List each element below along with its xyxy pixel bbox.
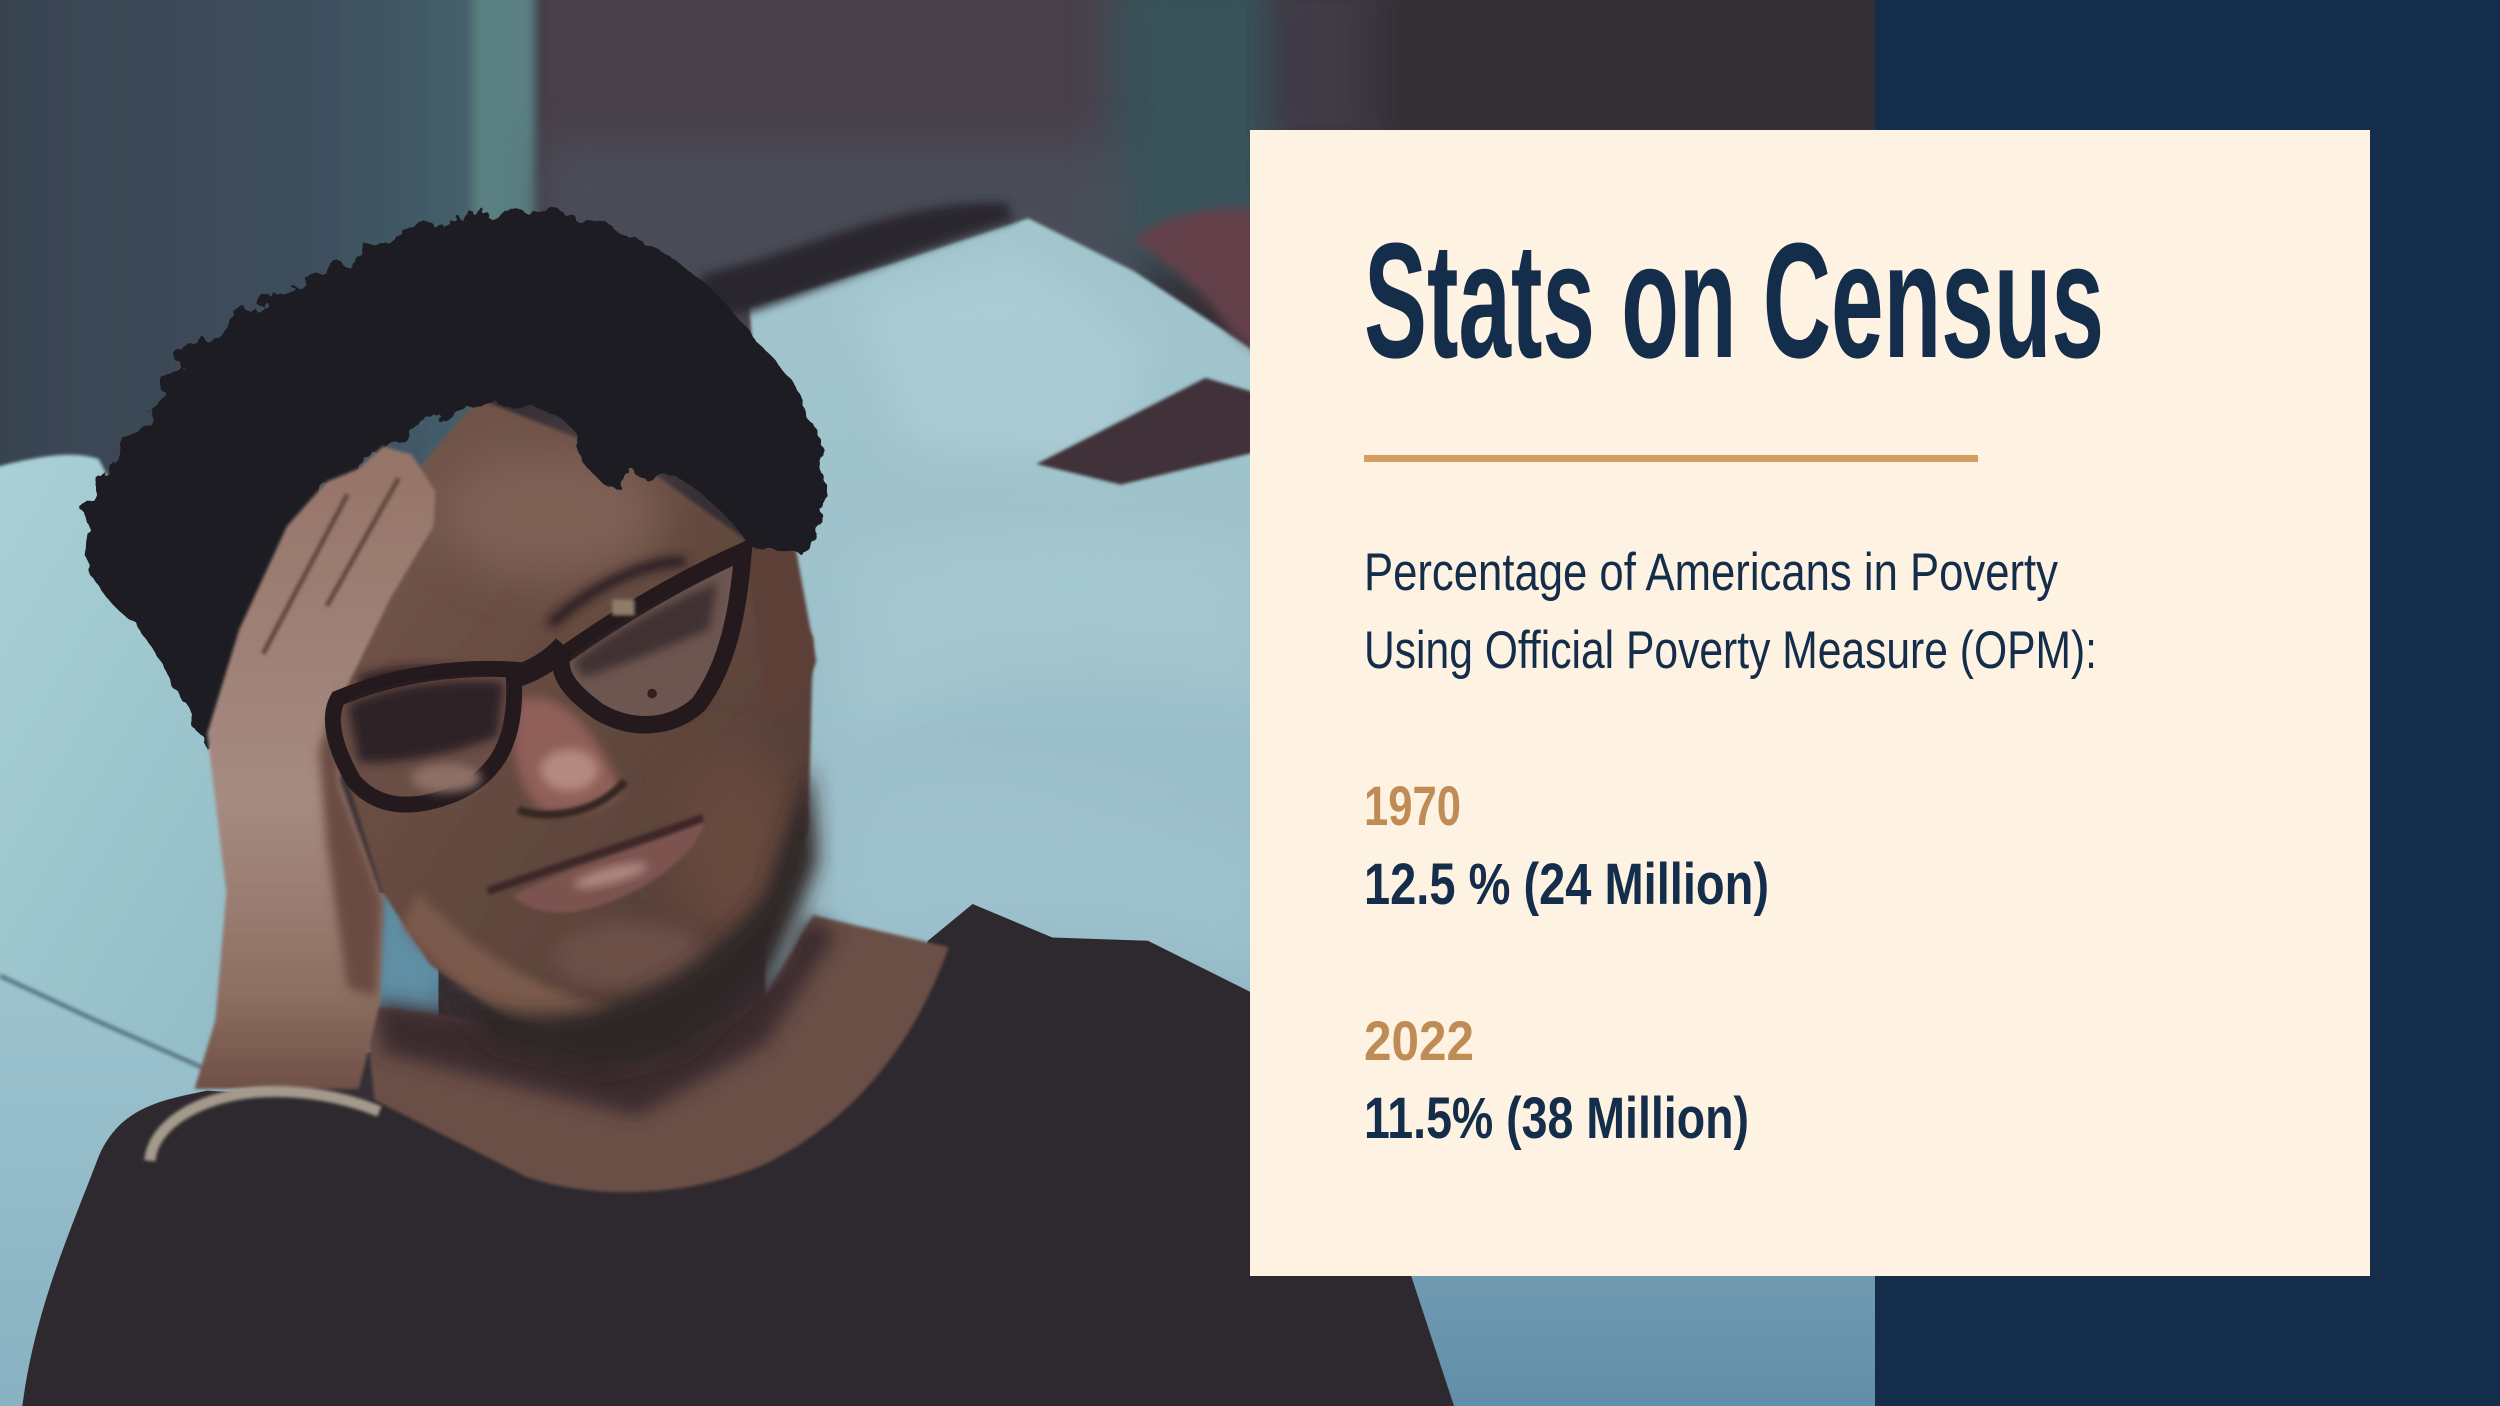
stat: 1970 xyxy=(1364,774,1769,917)
value 1970: 12.5 % (24 Million) xyxy=(1364,852,1769,917)
nostril shadow xyxy=(518,781,625,815)
bed sheet xyxy=(749,218,1913,1406)
cheek and chin tone xyxy=(670,749,797,941)
sleeve edge xyxy=(150,1091,379,1161)
year 1970: 1970 xyxy=(1364,774,1461,837)
blue sliver beside jaw xyxy=(366,892,438,1052)
content card xyxy=(1250,130,2370,1276)
divider rule xyxy=(1364,455,1978,462)
year 2022: 2022 xyxy=(1364,1009,1474,1072)
description text: Using Official Poverty Measure (OPM): xyxy=(1364,621,2097,680)
stat: 2022 xyxy=(1364,1009,1749,1151)
value 2022: 11.5% (38 Million) xyxy=(1364,1086,1749,1151)
jaw shadow xyxy=(430,765,816,1071)
hair xyxy=(82,210,826,749)
lip highlight xyxy=(572,858,650,893)
glasses xyxy=(333,552,743,805)
lower lip xyxy=(513,820,705,913)
nose xyxy=(514,697,619,812)
lip line xyxy=(488,818,703,891)
description text xyxy=(1364,543,2097,680)
nose tip highlight xyxy=(541,749,598,791)
smile-fold cheek light xyxy=(397,896,604,1021)
hand xyxy=(195,446,435,1089)
description text: Percentage of Americans in Poverty xyxy=(1364,543,2058,602)
neck xyxy=(364,915,949,1192)
pillow bottom shadow xyxy=(0,976,204,1068)
book xyxy=(1036,378,1260,485)
photo: crying woman wearing glasses, leaning on a bed xyxy=(0,0,1913,1406)
lower sheet, left xyxy=(0,975,255,1406)
pillow xyxy=(0,452,229,1032)
dark blanket strip xyxy=(702,202,1014,319)
eyebrows xyxy=(359,561,686,682)
shirt xyxy=(22,904,1454,1406)
blurred wall background xyxy=(0,0,1875,1190)
face xyxy=(343,399,813,1052)
red cloth xyxy=(1134,208,1260,354)
ear xyxy=(754,548,819,677)
hand shading xyxy=(319,686,383,996)
forehead light xyxy=(438,446,662,580)
finger lines xyxy=(263,478,399,654)
neck shadow xyxy=(375,917,837,1116)
highlights and folds on the sheet xyxy=(894,288,1123,446)
